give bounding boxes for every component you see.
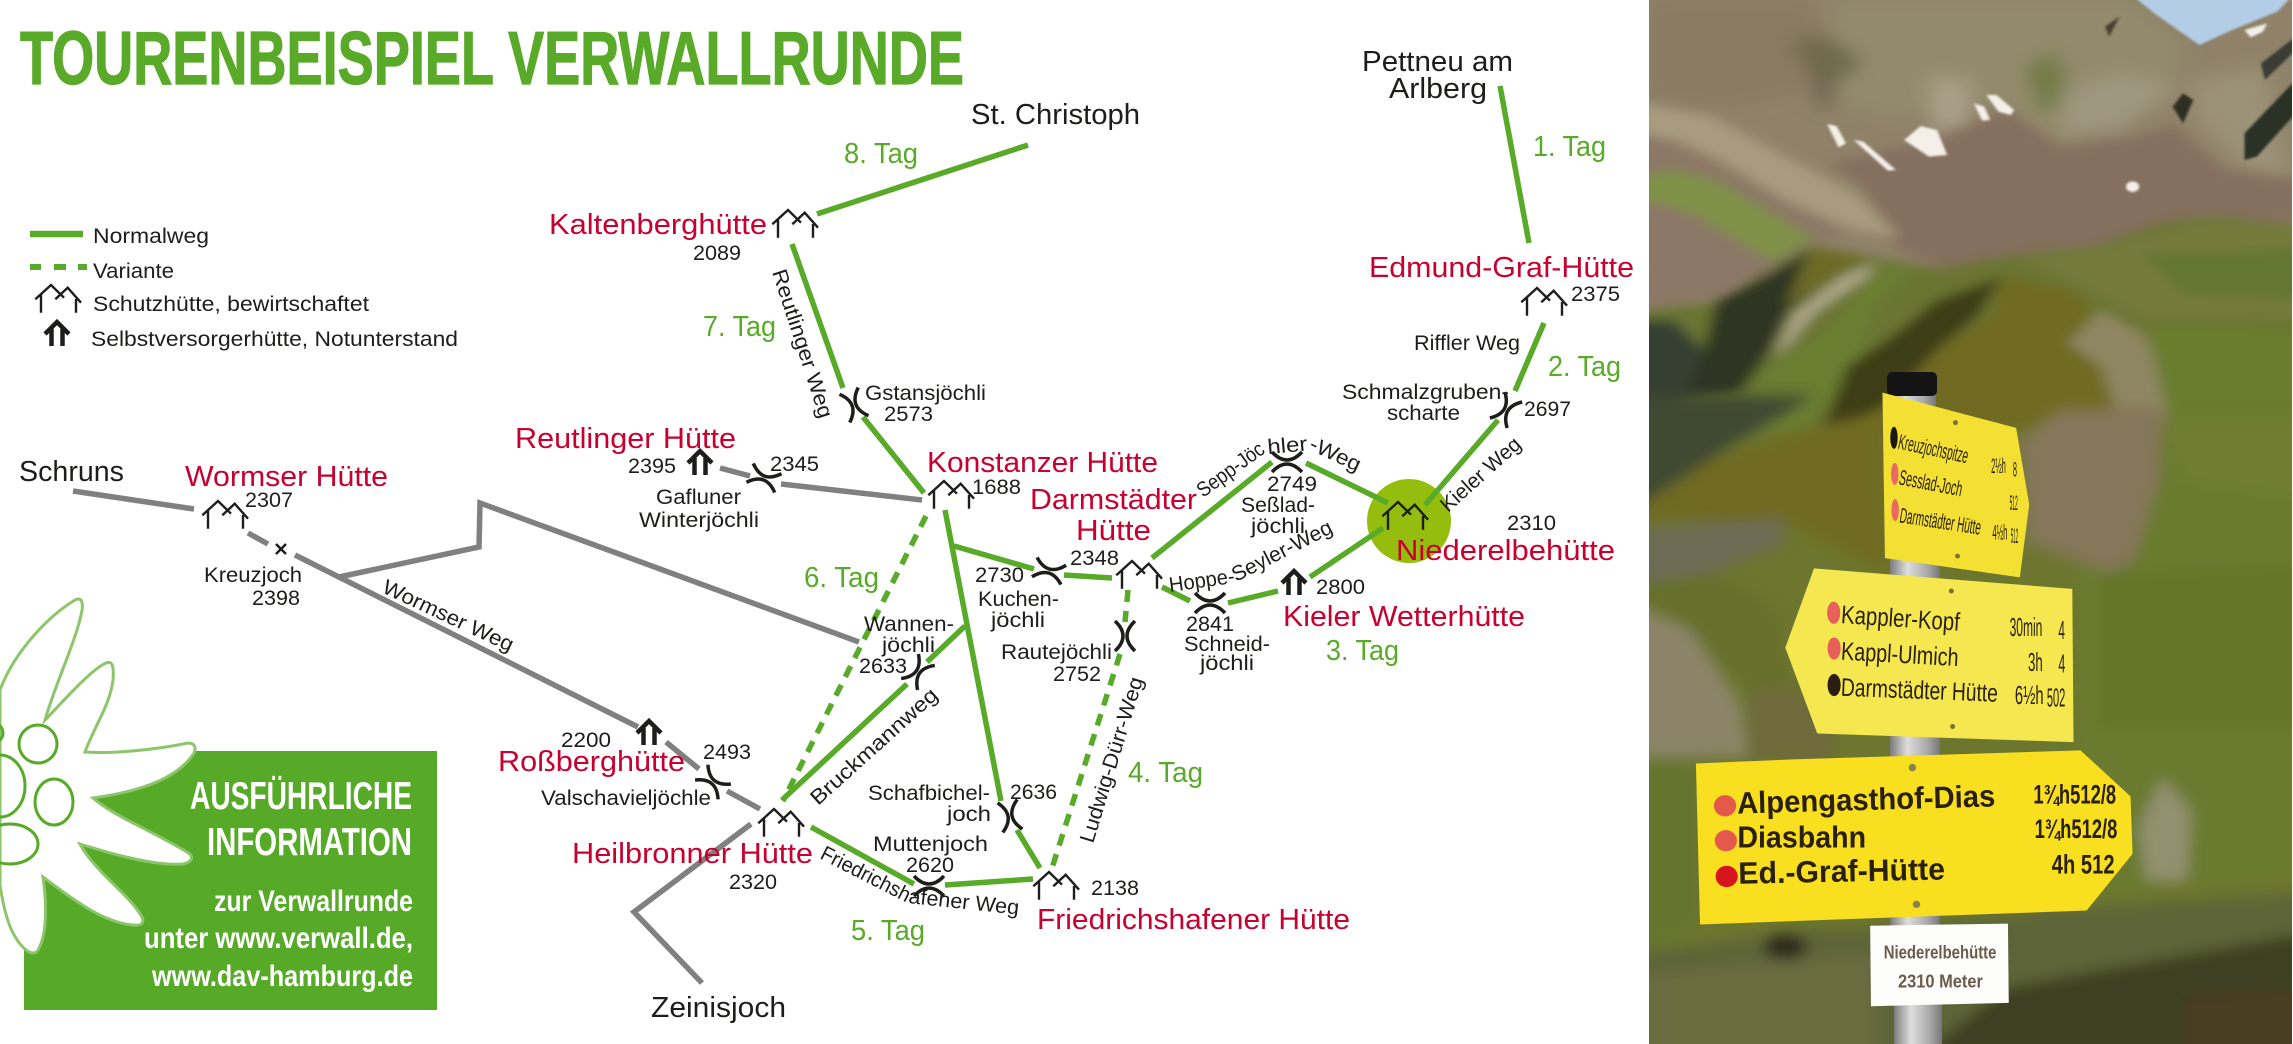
destination labels: Pettneu am [1362,46,1513,78]
info box heading: AUSFÜHRLICHE [190,775,412,818]
day labels: 8. Tag [844,138,918,170]
pass labels: 2730 [975,564,1024,587]
grey access routes [73,468,922,983]
pass labels: Rautejöchli [1001,641,1112,664]
day labels: 3. Tag [1326,635,1399,667]
pass labels: 2636 [1010,781,1057,804]
hut: Edmund-Graf-Hütte [1369,252,1634,316]
hut: Kaltenberghütte: Kaltenberghütte [549,209,767,241]
hut: Heilbronner Hütte: Heilbronner Hütte [572,838,813,870]
pass labels: Muttenjoch [873,833,988,856]
pass labels: Gstansjöchli [865,382,986,405]
sign: middle yellow sign: 4 [2058,617,2065,645]
sign: bottom yellow sign: 1¾h512/8 [2033,779,2116,810]
sign: top yellow sign: Kreuzjochspitze [1896,430,1971,468]
trail name labels [379,266,1526,920]
sign: top yellow sign: 4½h [1992,521,2008,545]
sign: top yellow sign: 8 [2013,457,2017,481]
hut: Kieler Wetterhütte [1282,571,1525,633]
hut: Roßberghütte: Roßberghütte [498,746,685,778]
pass labels: 2697 [1524,398,1571,421]
sign: bottom yellow sign: Ed.-Graf-Hütte [1738,851,1945,891]
sign: middle yellow sign: Kappl-Ulmich [1840,638,1959,672]
hut: Darmstädter Hütte: Hütte [1076,515,1151,547]
sign: middle yellow sign: 3h [2028,649,2043,677]
pass labels: Schafbichel- [868,782,990,805]
sign: middle yellow sign: Darmstädter Hütte [1840,674,1998,708]
sign: top yellow sign: 512 [2010,491,2018,515]
sign: bottom yellow sign: Diasbahn [1737,820,1866,855]
info box text: zur Verwallrunde [214,885,413,918]
pass labels: 2345 [770,453,819,476]
hut: Heilbronner Hütte: 2320 [729,871,777,894]
info box text: www.dav-hamburg.de [151,960,413,993]
photo background: lower meadow [1625,396,2293,1044]
hut: Darmstädter Hütte [1030,484,1197,589]
sign: middle yellow sign: 6½h [2015,682,2044,710]
hut: Niederelbehütte: Niederelbehütte [1396,535,1615,567]
signpost pole and cap [1887,372,1942,1044]
sign: top yellow sign: Sesslad-Joch [1897,466,1964,501]
destination labels: St. Christoph [971,99,1140,131]
pass labels: Gafluner [656,486,741,509]
legend: Normalweg: Normalweg [93,225,209,248]
legend: Selbstversorgerhütte: Selbstversorgerhütte, Notunterstand [91,328,458,351]
pass symbols [276,387,1522,896]
pass labels: Wannen- [864,613,954,636]
pass labels: 2493 [703,741,751,764]
hut: Niederelbehütte [1382,502,1615,567]
legend: Variante: Variante [93,260,174,283]
hut: Darmstädter Hütte: 2348 [1070,547,1119,570]
niederelbehütte highlight circle [1367,479,1451,563]
hut: Konstanzer Hütte: Konstanzer Hütte [927,447,1158,479]
hut: Konstanzer Hütte [927,447,1158,509]
pass labels: jöchli [1250,515,1305,538]
info box heading [190,775,412,864]
icon: edelweiss flower [0,599,195,953]
hut: Wormser Hütte: Wormser Hütte [185,461,388,493]
pass labels: jöchli [990,609,1045,632]
destination labels: Zeinisjoch [651,992,786,1024]
trail name labels: hler [1266,433,1308,459]
info box text: unter www.verwall.de, [144,922,413,955]
sign: bottom yellow sign: 1¾h512/8 [2035,813,2117,844]
hut: Roßberghütte: 2200 [561,729,611,752]
sign: bottom yellow sign: 4h 512 [2052,849,2115,880]
day labels: 6. Tag [804,562,879,594]
hut: Friedrichshafener Hütte [1033,872,1350,936]
hut: Edmund-Graf-Hütte: Edmund-Graf-Hütte [1369,252,1634,284]
sign: top yellow sign [1882,393,2029,577]
day labels: 7. Tag [703,311,776,343]
info box heading: INFORMATION [207,821,412,864]
pass labels: Schmalzgruben- [1342,381,1509,404]
pass labels: Winterjöchli [639,509,759,532]
pass labels: 2752 [1053,663,1101,686]
day labels: 1. Tag [1533,131,1606,163]
trail name labels: Hoppe- [1167,565,1236,597]
trail name labels: Friedrichsh [817,842,914,907]
trail name labels: Seyler-Weg [1228,516,1336,586]
hut: Edmund-Graf-Hütte: 2375 [1571,283,1620,306]
hut: Wormser Hütte [185,461,388,529]
pass labels: 2633 [859,655,907,678]
hut: Heilbronner Hütte [572,809,813,894]
pass labels: 2620 [906,854,954,877]
hut: Friedrichshafener Hütte: 2138 [1091,877,1139,900]
hut: Reutlinger Hütte: 2395 [628,455,676,478]
legend [30,225,458,351]
pass labels [204,332,1571,877]
hut: Roßberghütte [498,721,685,778]
hut: Reutlinger Hütte [515,423,736,478]
sign: top yellow sign: 2½h [1991,454,2006,478]
pass labels: joch [946,803,991,826]
sign: bottom yellow sign [1696,750,2133,924]
trail name labels: Kieler Weg [1436,433,1526,517]
trail name labels: Wormser Weg [379,576,517,657]
signs [1696,393,2133,1006]
pass labels: 2573 [884,403,933,426]
pass labels: 2749 [1267,473,1317,496]
pass labels: jöchli [881,634,935,657]
pass labels: jöchli [1199,652,1254,675]
trail name labels: afener Weg [907,885,1020,920]
pass labels: Riffler Weg [1414,332,1520,355]
trail name labels: Bruckmannweg [806,684,942,810]
info box text [144,885,413,993]
sign: top yellow sign: Darmstädter Hütte [1898,504,1983,540]
hut: Niederelbehütte: 2310 [1507,512,1556,535]
hut: Kieler Wetterhütte: 2800 [1316,576,1365,599]
pass labels: 2841 [1186,613,1234,636]
sign: top yellow sign: 512 [2011,524,2018,548]
hut: Reutlinger Hütte: Reutlinger Hütte [515,423,736,455]
hut: Darmstädter Hütte: Darmstädter [1030,484,1197,516]
legend: Schutzhütte [35,285,369,316]
destination labels: Schruns [19,456,124,488]
sign: middle yellow sign: 502 [2047,684,2065,712]
hut: Konstanzer Hütte: 1688 [972,476,1021,499]
title: TOURENBEISPIEL VERWALLRUNDE [20,16,964,100]
hut: Kaltenberghütte [549,209,818,265]
destination labels: Arlberg [1389,73,1487,105]
sign: bottom yellow sign: Alpengasthof-Dias [1737,778,1996,821]
info box [0,599,437,1010]
day labels: 2. Tag [1548,351,1621,383]
pass labels: Kuchen- [978,588,1059,611]
sign: white altitude plate: Niederelbehütte [1884,942,1996,963]
pass labels: 2398 [252,587,300,610]
pass labels: Valschavieljöchle [541,787,711,810]
sign: middle yellow sign: 30min [2010,614,2042,642]
legend: Schutzhütte: Schutzhütte, bewirtschaftet [93,293,369,316]
trail name labels: Ludwig-Dürr-Weg [1076,674,1148,845]
trail name labels: Reutlinger Weg [767,266,837,421]
panel: photo of signpost at Niederelbehütte [1625,0,2293,1044]
green route network [782,86,1544,885]
photo background: upper mountains [1625,0,2293,430]
day labels [703,131,1621,947]
pass labels: Kreuzjoch [204,564,302,587]
legend: Selbstversorgerhütte [45,322,458,351]
sign: white altitude plate [1870,924,2009,1006]
pass labels: Schneid- [1184,633,1270,656]
destination labels [19,46,1513,1024]
hut: Friedrichshafener Hütte: Friedrichshafener Hütte [1037,904,1350,936]
pass labels: scharte [1387,402,1460,425]
sign: white altitude plate: 2310 Meter [1898,970,1983,991]
hut: Wormser Hütte: 2307 [245,489,293,512]
sign: middle yellow sign: 4 [2058,650,2065,678]
sign: middle yellow sign: Kappler-Kopf [1840,601,1961,637]
sign: middle yellow sign [1785,568,2074,742]
hut: Kieler Wetterhütte: Kieler Wetterhütte [1283,601,1525,633]
trail name labels: -Weg [1306,433,1365,476]
day labels: 5. Tag [851,915,925,947]
hut: Kaltenberghütte: 2089 [693,242,741,265]
trail name labels: Sepp-Jöc [1192,438,1269,502]
pass labels: Seßlad- [1241,494,1315,517]
day labels: 4. Tag [1128,757,1203,789]
